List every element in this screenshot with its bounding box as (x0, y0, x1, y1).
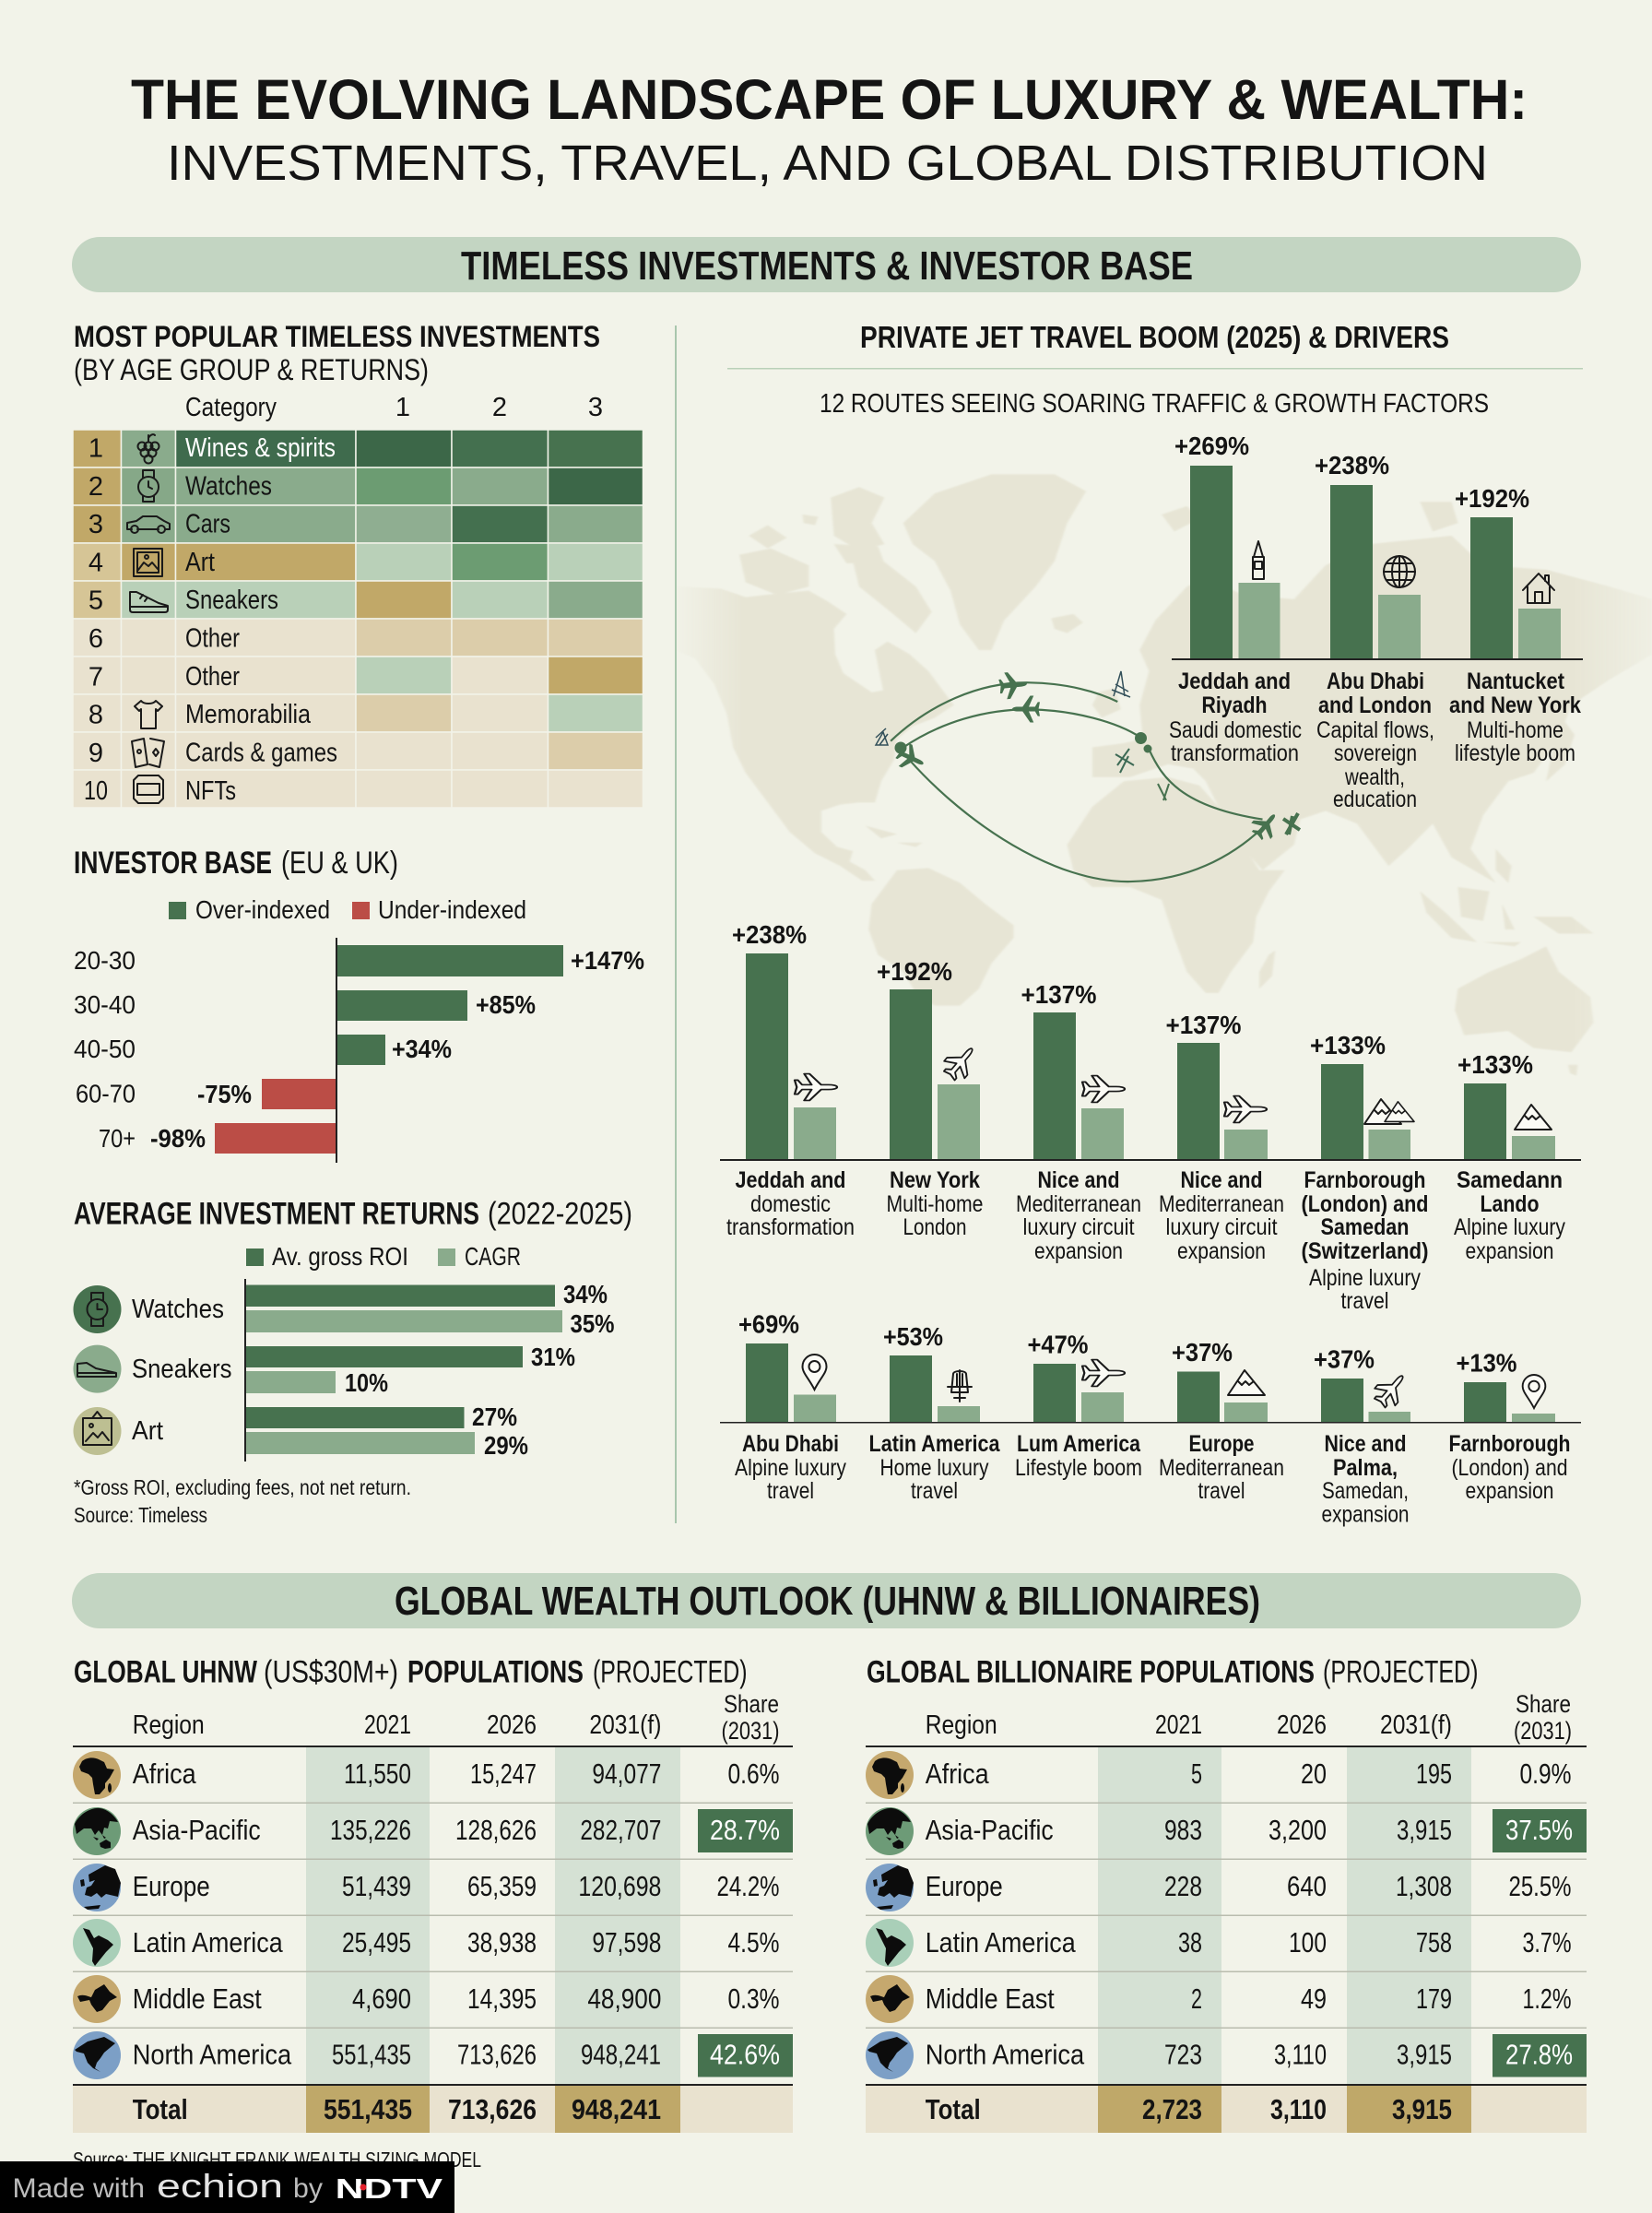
bar chart: middle routes: +133% (1457, 1050, 1533, 1079)
bar chart: top routes: and London (1318, 692, 1432, 718)
heading: private jet (727, 320, 1583, 419)
legend: investor base (169, 895, 526, 924)
section banner: timeless investments: TIMELESS INVESTMENTS & INVESTOR BASE (461, 243, 1193, 289)
watermark bar: NDTV (336, 2172, 443, 2205)
footnote (74, 1475, 411, 1527)
bar chart: middle routes: Alpine luxury (1454, 1214, 1565, 1240)
icons: planes (795, 1040, 1267, 1122)
bar chart: middle routes: expansion (1177, 1238, 1266, 1264)
table header: Share (1516, 1690, 1571, 1718)
bar chart: investor base: +34% (392, 1035, 452, 1063)
bar chart: lower routes: (London) and (1451, 1455, 1567, 1481)
source note: Source: THE KNIGHT FRANK WEALTH SIZING MODEL (73, 2148, 481, 2172)
bar chart: investor base (74, 938, 644, 1163)
bar chart: top routes: +269% (1174, 432, 1249, 460)
title (131, 68, 1528, 191)
table numbers: 49 (1301, 1982, 1327, 2015)
bar chart: lower routes: Lifestyle boom (1015, 1455, 1142, 1481)
bar chart: middle routes: +238% (732, 920, 807, 949)
bar chart: lower routes: travel (1198, 1478, 1245, 1504)
region names: Latin America (926, 1926, 1076, 1959)
table header: 2031(f) (589, 1710, 661, 1740)
title: INVESTMENTS, TRAVEL, AND GLOBAL DISTRIBUTION (167, 136, 1488, 191)
icon: playing cards (132, 739, 164, 767)
route stops (894, 741, 907, 754)
heading: most popular investments: MOST POPULAR TIMELESS INVESTMENTS (74, 320, 600, 353)
icon label: sneakers: Sneakers (132, 1355, 232, 1384)
table numbers: 14,395 (467, 1982, 537, 2015)
region names: Total (926, 2093, 981, 2125)
category labels: Cards & games (185, 738, 337, 767)
bar chart: returns: 35% (570, 1309, 615, 1338)
panel: UHNW table (73, 1654, 793, 2133)
rank numbers: 8 (88, 701, 103, 730)
bar chart: lower routes: Latin America (868, 1431, 1000, 1457)
heading: average returns: (2022-2025) (488, 1197, 632, 1232)
bar chart: investor base: -75% (197, 1080, 252, 1108)
region names: Africa (133, 1757, 196, 1790)
bar chart: middle routes (720, 920, 1581, 1314)
table numbers: 37.5% (1505, 1814, 1573, 1846)
bar chart: top routes: lifestyle boom (1455, 740, 1575, 766)
table numbers: 4.5% (728, 1926, 780, 1959)
table numbers: 758 (1416, 1926, 1452, 1959)
bar chart: top routes (1169, 432, 1583, 812)
labels: Abu Dhabi (742, 1431, 839, 1457)
icon: plane tilted (1370, 1367, 1412, 1412)
table numbers: 0.9% (1519, 1757, 1571, 1790)
table numbers: 3,110 (1274, 2038, 1327, 2070)
table numbers: 97,598 (592, 1926, 661, 1959)
table numbers: 15,247 (470, 1757, 537, 1790)
bar chart: lower routes: expansion (1322, 1501, 1409, 1527)
bar chart: investor base: 40-50 (74, 1035, 136, 1063)
legend: returns (246, 1242, 521, 1271)
table numbers: 42.6% (710, 2038, 780, 2070)
section banner: global wealth (72, 1573, 1581, 1628)
bar chart: investor base: 60-70 (76, 1079, 136, 1108)
bar chart: middle routes: Samedann (1457, 1167, 1563, 1193)
bar chart: returns (244, 1279, 615, 1462)
region names: North America (926, 2038, 1085, 2070)
region names: Middle East (133, 1982, 262, 2015)
heading: (PROJECTED) (1323, 1654, 1479, 1689)
heading: private jet: PRIVATE JET TRAVEL BOOM (2025) & DRIVERS (860, 320, 1449, 354)
bar chart: lower routes: Mediterranean (1159, 1455, 1284, 1481)
table header: Region (133, 1710, 205, 1740)
category labels: Other (185, 662, 240, 692)
legend: investor base: Under-indexed (378, 895, 526, 924)
table numbers: 551,435 (324, 2093, 412, 2125)
region names: Africa (926, 1757, 989, 1790)
world map (677, 474, 1652, 1075)
table header (133, 1690, 779, 1745)
table numbers: 983 (1164, 1814, 1202, 1846)
rank numbers: 1 (88, 433, 103, 463)
table numbers: 4,690 (352, 1982, 411, 2015)
bar chart: middle routes: luxury circuit (1023, 1214, 1135, 1240)
bar chart: returns: 10% (345, 1368, 388, 1397)
table numbers: 2,723 (1142, 2093, 1202, 2125)
bar chart: lower routes: Lum America (1017, 1431, 1141, 1457)
table numbers: 135,226 (330, 1814, 411, 1846)
table numbers: 65,359 (467, 1870, 537, 1902)
table header: 2 (492, 393, 507, 422)
table header: Category (185, 393, 277, 422)
bar chart: middle routes: +192% (877, 957, 952, 986)
bar chart: top routes: Riyadh (1202, 692, 1267, 718)
category labels: Watches (185, 471, 272, 501)
watermark bar: by (293, 2173, 323, 2204)
bar chart: investor base: 20-30 (74, 946, 136, 975)
region names: Europe (926, 1870, 1003, 1902)
bar chart: middle routes: +133% (1310, 1031, 1386, 1059)
table header: Share (724, 1690, 779, 1718)
watermark bar (0, 2161, 454, 2213)
table numbers: 1.2% (1523, 1982, 1571, 2015)
heatmap table (73, 393, 643, 808)
table numbers: 94,077 (592, 1757, 661, 1790)
table numbers: 3,915 (1392, 2093, 1452, 2125)
table header: 2026 (487, 1710, 537, 1740)
bar chart: top routes: Nantucket (1467, 669, 1565, 694)
icon: car (127, 516, 170, 533)
rank numbers: 6 (88, 624, 103, 654)
bar chart: top routes: education (1333, 787, 1417, 812)
table numbers: 195 (1416, 1757, 1452, 1790)
bar chart: lower routes: Nice and (1324, 1431, 1407, 1457)
table numbers: 179 (1416, 1982, 1452, 2015)
bar chart: middle routes: Nice and (1180, 1167, 1263, 1193)
watermark bar: Made with (13, 2173, 145, 2204)
bar chart: lower routes: +13% (1457, 1348, 1517, 1378)
bar chart: middle routes: (London) and (1302, 1191, 1429, 1217)
icon: t-shirt (135, 701, 162, 728)
rank numbers (84, 433, 108, 806)
table numbers: 48,900 (587, 1982, 661, 2015)
bar chart: top routes: +192% (1455, 484, 1529, 513)
icon label: art (74, 1407, 163, 1455)
bar chart: returns: 29% (484, 1431, 528, 1460)
heading: (US$30M+) (264, 1654, 398, 1689)
category labels: Art (185, 548, 215, 577)
category labels: Wines & spirits (185, 433, 336, 463)
table numbers: 100 (1289, 1926, 1327, 1959)
table background (866, 1746, 1587, 2133)
bar chart: investor base: 70+ (99, 1124, 136, 1153)
bar chart: middle routes: +137% (1021, 980, 1097, 1009)
bar chart: middle routes: domestic (750, 1191, 831, 1217)
legend: returns: Av. gross ROI (272, 1242, 408, 1271)
table numbers: 551,435 (332, 2038, 411, 2070)
category labels: Memorabilia (185, 700, 312, 729)
region names: North America (133, 2038, 292, 2070)
bar chart: top routes: +238% (1315, 451, 1389, 479)
bar chart: middle routes: Nice and (1038, 1167, 1119, 1193)
region globes (73, 1751, 121, 2079)
table numbers: 948,241 (581, 2038, 661, 2070)
legend: returns: CAGR (465, 1242, 521, 1271)
bar chart: top routes: wealth, (1344, 764, 1405, 790)
region names: Asia-Pacific (133, 1814, 261, 1846)
table header: 2021 (1155, 1710, 1202, 1740)
bar chart: returns: 31% (531, 1343, 575, 1371)
table numbers: 713,626 (457, 2038, 537, 2070)
rank numbers: 4 (88, 548, 103, 577)
region names: Total (133, 2093, 188, 2125)
icon label: watches: Watches (132, 1295, 224, 1324)
section banner: global wealth: GLOBAL WEALTH OUTLOOK (UHNW & BILLIONAIRES) (395, 1579, 1260, 1624)
icon: house (1523, 574, 1554, 603)
bar chart: lower routes (720, 1309, 1581, 1527)
rank numbers: 3 (88, 510, 103, 539)
heading: POPULATIONS (407, 1654, 584, 1689)
table numbers: 282,707 (580, 1814, 661, 1846)
region names: Middle East (926, 1982, 1055, 2015)
category labels (185, 433, 337, 806)
icon: pin (802, 1355, 826, 1390)
heading: (PROJECTED) (593, 1654, 747, 1689)
table numbers: 3,200 (1268, 1814, 1327, 1846)
table numbers: 228 (1164, 1870, 1202, 1902)
bar chart: middle routes: Alpine luxury (1309, 1265, 1421, 1291)
heading: investor base: INVESTOR BASE (74, 846, 272, 881)
bar chart: middle routes: expansion (1034, 1238, 1123, 1264)
region names: Europe (133, 1870, 210, 1902)
table numbers: 948,241 (572, 2093, 661, 2125)
heading: GLOBAL BILLIONAIRE POPULATIONS (867, 1654, 1315, 1689)
bar chart: lower routes: Palma, (1333, 1455, 1398, 1481)
heading (74, 1654, 747, 1689)
flight routes (876, 670, 1300, 882)
heading: investor base: (EU & UK) (281, 846, 398, 881)
bar chart: middle routes: (Switzerland) (1302, 1238, 1429, 1264)
table numbers: 128,626 (455, 1814, 537, 1846)
bar chart: returns: 34% (563, 1280, 608, 1308)
table numbers: 3.7% (1523, 1926, 1571, 1959)
table numbers: 28.7% (710, 1814, 780, 1846)
table header: 2026 (1277, 1710, 1327, 1740)
icon label: art: Art (132, 1416, 163, 1446)
bar chart: investor base: +147% (571, 946, 644, 975)
table numbers: 38,938 (467, 1926, 537, 1959)
table numbers: 1,308 (1396, 1870, 1452, 1902)
table numbers: 27.8% (1505, 2038, 1573, 2070)
table numbers: 3,915 (1397, 2038, 1452, 2070)
bar chart: middle routes: travel (1340, 1288, 1388, 1314)
table numbers: 713,626 (448, 2093, 537, 2125)
bar chart: investor base: 30-40 (74, 990, 136, 1019)
heading: most popular investments (74, 320, 600, 386)
icon: globe (1384, 556, 1415, 587)
table header (926, 1690, 1572, 1745)
heading: average returns: AVERAGE INVESTMENT RETURNS (74, 1197, 479, 1232)
bar chart: returns: 27% (472, 1402, 517, 1431)
icon: grapes (138, 434, 159, 463)
icon: clock tower (1253, 541, 1264, 579)
category labels: Other (185, 623, 240, 653)
bar chart: lower routes: Samedan, (1322, 1478, 1409, 1504)
table header: 2031(f) (1380, 1710, 1452, 1740)
bar chart: lower routes: Home luxury (879, 1455, 989, 1481)
table numbers: 3,915 (1397, 1814, 1452, 1846)
table header: 1 (395, 393, 410, 422)
labels: Jeddah and (736, 1167, 846, 1193)
icon: sneaker (130, 592, 168, 612)
panel: billionaire table (866, 1654, 1587, 2133)
table header: (2031) (1514, 1717, 1572, 1745)
icons: mountains (1364, 1099, 1552, 1130)
table background (73, 1746, 793, 2133)
table numbers: 11,550 (344, 1757, 411, 1790)
bar chart: top routes: sovereign (1334, 740, 1417, 766)
category labels: NFTs (185, 776, 236, 806)
region globes (866, 1751, 914, 2079)
bar chart: lower routes: +69% (738, 1309, 799, 1339)
region names: Asia-Pacific (926, 1814, 1054, 1846)
bar chart: lower routes: travel (767, 1478, 814, 1504)
bar chart: top routes: Multi-home (1467, 717, 1564, 743)
icon: fountain (948, 1370, 972, 1402)
icon label: sneakers (74, 1345, 232, 1393)
icon: watch (138, 470, 159, 502)
table header: 3 (588, 393, 603, 422)
table header: Region (926, 1710, 997, 1740)
footnote: *Gross ROI, excluding fees, not net return. (74, 1475, 411, 1499)
bar chart: top routes: Saudi domestic (1169, 717, 1302, 743)
region names: Latin America (133, 1926, 283, 1959)
bar chart: lower routes: travel (911, 1478, 958, 1504)
table numbers: 38 (1178, 1926, 1202, 1959)
table header (185, 393, 603, 422)
rank numbers: 5 (88, 586, 103, 616)
bar chart: middle routes: Lando (1481, 1191, 1540, 1217)
planes (998, 670, 1028, 700)
bar chart: middle routes: London (903, 1214, 966, 1240)
labels: Jeddah and (1178, 669, 1291, 694)
bar chart: lower routes: +53% (883, 1322, 943, 1351)
heading: most popular investments: (BY AGE GROUP & RETURNS) (74, 353, 429, 386)
bar chart: lower routes: +37% (1314, 1344, 1375, 1374)
bar chart: lower routes: +37% (1172, 1338, 1233, 1367)
bar chart: middle routes: New York (890, 1167, 980, 1193)
bar chart: middle routes: luxury circuit (1165, 1214, 1278, 1240)
heading: private jet: 12 ROUTES SEEING SOARING TRAFFIC & GROWTH FACTORS (820, 389, 1489, 419)
icon: plane (1082, 1360, 1125, 1386)
table numbers: 5 (1191, 1757, 1202, 1790)
rank numbers: 10 (84, 776, 108, 806)
table numbers: 723 (1164, 2038, 1202, 2070)
table header: 2021 (364, 1710, 411, 1740)
table numbers: 120,698 (578, 1870, 661, 1902)
bar chart: investor base: -98% (150, 1124, 206, 1153)
landmark marks (1112, 671, 1130, 697)
rank numbers: 2 (88, 472, 103, 502)
heading: GLOBAL UHNW (74, 1654, 258, 1689)
region names (926, 1757, 1085, 2125)
table numbers (1142, 1757, 1573, 2125)
table numbers: 0.3% (728, 1982, 780, 2015)
bar chart: lower routes: +47% (1027, 1330, 1089, 1359)
category labels: Cars (185, 510, 230, 539)
table numbers (324, 1757, 780, 2125)
bar chart: middle routes: expansion (1466, 1238, 1554, 1264)
bar chart: top routes: transformation (1171, 740, 1299, 766)
bar chart: lower routes: Alpine luxury (735, 1455, 846, 1481)
bar chart: middle routes: Samedan (1320, 1214, 1409, 1240)
footnote: Source: Timeless (74, 1503, 207, 1527)
icon: mountain (1228, 1370, 1265, 1395)
bar chart: middle routes: Farnborough (1304, 1167, 1425, 1193)
legend: investor base: Over-indexed (195, 895, 330, 924)
bar chart: middle routes: +137% (1165, 1011, 1242, 1039)
bar chart: middle routes: Mediterranean (1016, 1191, 1141, 1217)
heatmap cells (73, 430, 643, 808)
icon: nft stamp (134, 775, 163, 803)
section banner: timeless investments (72, 237, 1581, 292)
bar chart: top routes: Abu Dhabi (1327, 669, 1424, 694)
table numbers: 20 (1301, 1757, 1327, 1790)
watermark bar: echion (157, 2167, 283, 2205)
bar chart: top routes: Capital flows, (1316, 717, 1434, 743)
rank numbers: 7 (88, 662, 103, 692)
category labels: Sneakers (185, 586, 278, 615)
bar chart: investor base: +85% (476, 990, 536, 1019)
region names (133, 1757, 292, 2125)
bar chart: middle routes: Multi-home (887, 1191, 983, 1217)
table numbers: 24.2% (717, 1870, 780, 1902)
table numbers: 2 (1191, 1982, 1202, 2015)
bar chart: top routes: and New York (1449, 692, 1581, 718)
bar chart: lower routes: Farnborough (1449, 1431, 1571, 1457)
bar chart: lower routes: Europe (1189, 1431, 1255, 1457)
bar chart: middle routes: transformation (726, 1214, 855, 1240)
table numbers: 0.6% (728, 1757, 780, 1790)
rank numbers: 9 (88, 739, 103, 768)
bar chart: middle routes: Mediterranean (1159, 1191, 1284, 1217)
icon label: watches (74, 1285, 224, 1333)
title: THE EVOLVING LANDSCAPE OF LUXURY & WEALTH: (131, 68, 1528, 131)
table numbers: 640 (1287, 1870, 1327, 1902)
icon: picture frame (134, 549, 162, 576)
bar chart: lower routes: expansion (1466, 1478, 1554, 1504)
table numbers: 25.5% (1508, 1870, 1571, 1902)
table numbers: 25,495 (342, 1926, 411, 1959)
table header: (2031) (721, 1717, 780, 1745)
table numbers: 51,439 (342, 1870, 411, 1902)
table numbers: 3,110 (1270, 2093, 1327, 2125)
icon: pin (1523, 1375, 1545, 1408)
